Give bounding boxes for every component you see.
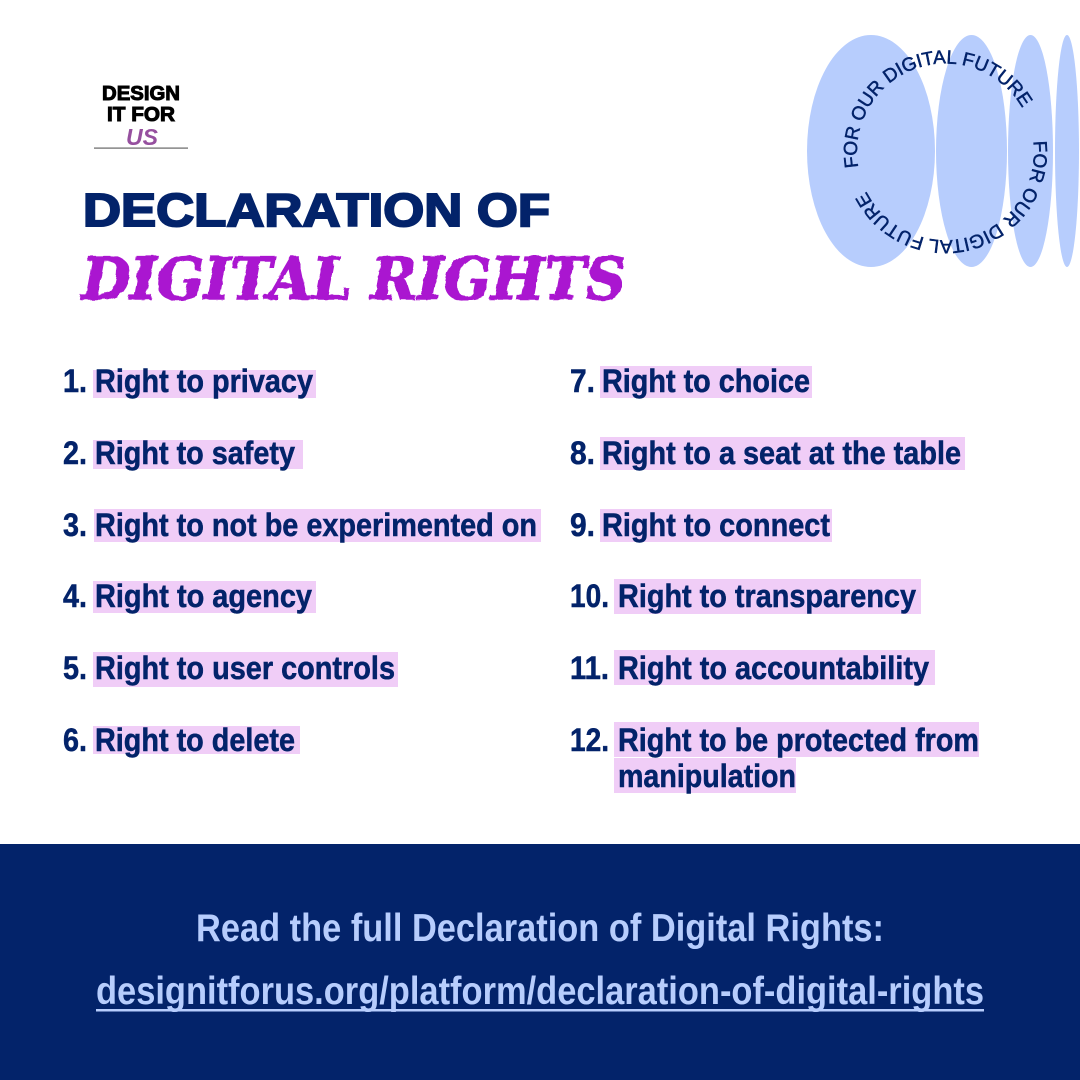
right 4: 4. — [63, 578, 87, 614]
right 3: Right to not be experimented on — [95, 507, 537, 543]
right 9: 9. — [570, 507, 595, 543]
right 12: manipulation — [618, 758, 796, 794]
right 8: 8. — [570, 435, 595, 471]
right 1: Right to privacy — [95, 363, 313, 399]
heading: Digital Rights: DIGITAL RIGHTS — [80, 245, 626, 313]
right 6: Right to delete — [95, 722, 295, 758]
right 11: 11. — [570, 650, 609, 686]
right 12: Right to be protected from — [618, 722, 979, 758]
right 12 — [570, 722, 979, 794]
logo: Design It For Us: IT FOR — [107, 103, 175, 126]
footer link: designitforus.org/platform/declaration-of-digital-rights — [96, 970, 984, 1013]
footer panel — [0, 844, 1080, 1080]
logo: Design It For Us: US — [126, 124, 159, 150]
right 5: Right to user controls — [95, 650, 395, 686]
heading: Declaration of: DECLARATION OF — [83, 184, 550, 236]
right 2: 2. — [63, 435, 87, 471]
right 8: Right to a seat at the table — [602, 435, 961, 471]
right 11: Right to accountability — [618, 650, 929, 686]
decorative badge: ellipses with circular text — [807, 35, 1079, 267]
right 12: 12. — [570, 722, 609, 758]
right 1: 1. — [63, 363, 87, 399]
list: rights 7 to 12 — [570, 363, 979, 794]
list: rights 1 to 6 — [63, 363, 541, 758]
right 9: Right to connect — [602, 507, 830, 543]
decorative badge: ellipses with circular text: FOR OUR DIGITAL FUTURE — [855, 142, 1048, 254]
right 10: Right to transparency — [618, 578, 916, 614]
right 4: Right to agency — [95, 578, 312, 614]
footer text: call to action: Read the full Declaration of Digital Rights: — [196, 907, 884, 950]
right 3: 3. — [63, 507, 87, 543]
right 2: Right to safety — [95, 435, 295, 471]
right 6: 6. — [63, 722, 87, 758]
right 7: Right to choice — [602, 363, 810, 399]
logo: Design It For Us — [94, 82, 188, 150]
logo: Design It For Us: DESIGN — [102, 82, 180, 105]
right 10: 10. — [570, 578, 609, 614]
right 5: 5. — [63, 650, 87, 686]
right 7: 7. — [570, 363, 595, 399]
decorative badge: ellipses with circular text: FOR OUR DIGITAL FUTURE — [844, 50, 1033, 168]
